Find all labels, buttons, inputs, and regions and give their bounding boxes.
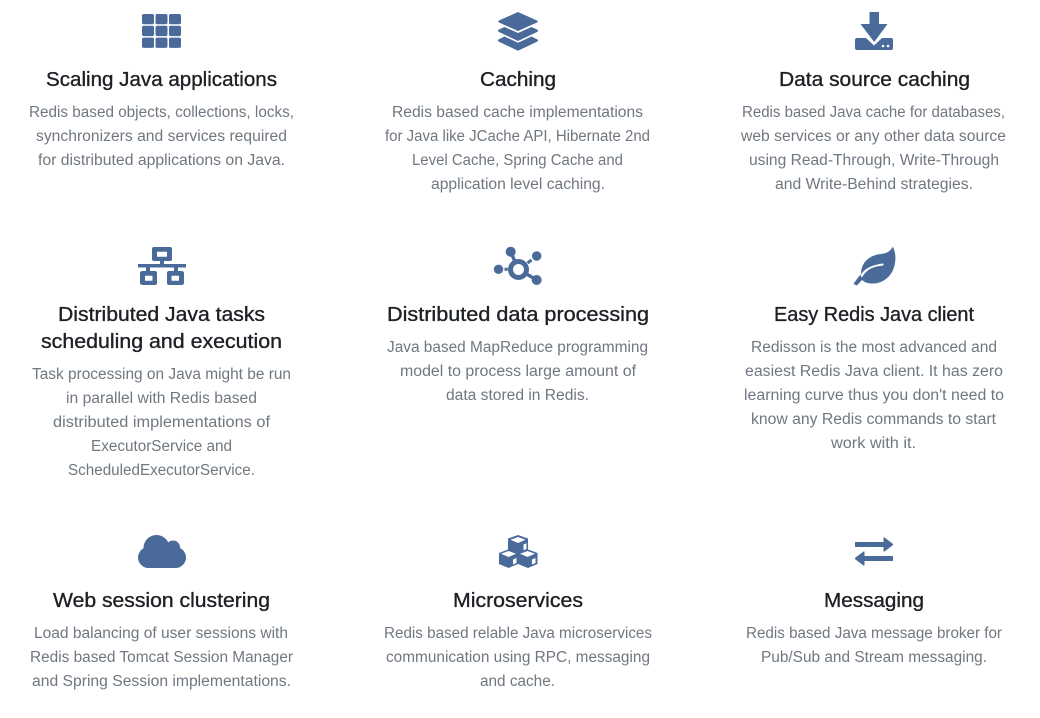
panel: Messaging <box>746 537 1002 666</box>
heading: Easy Redis Java client <box>774 304 974 326</box>
icon: network <box>138 247 186 285</box>
text block: Level Cache, Spring Cache and <box>412 152 623 169</box>
text block: know any Redis commands to start <box>751 411 997 428</box>
panel: Caching <box>385 12 650 193</box>
text block: Redis based cache implementations <box>392 104 643 121</box>
heading: scheduling and execution <box>41 331 282 353</box>
text block <box>30 625 293 690</box>
icon: cubes <box>499 535 538 568</box>
text block: Redis based Java message broker for <box>746 625 1002 642</box>
text block: for Java like JCache API, Hibernate 2nd <box>385 128 650 145</box>
text block <box>744 339 1004 452</box>
text block: for distributed applications on Java. <box>38 152 285 169</box>
text block: application level caching. <box>431 176 605 193</box>
panel: Distributed Java tasks <box>32 247 291 479</box>
text block <box>29 104 294 169</box>
text block <box>384 625 652 690</box>
text block: and Write-Behind strategies. <box>775 176 973 193</box>
heading: Messaging <box>824 590 924 612</box>
heading: Caching <box>480 69 556 91</box>
text block: Java based MapReduce programming <box>387 339 648 356</box>
heading <box>41 304 282 353</box>
text block: and Spring Session implementations. <box>32 673 291 690</box>
text block: communication using RPC, messaging <box>386 649 650 666</box>
panel: Distributed data processing <box>387 247 649 404</box>
text block: learning curve thus you don't need to <box>744 387 1004 404</box>
text block: and cache. <box>480 673 555 690</box>
text block: Task processing on Java might be run <box>32 366 291 383</box>
text block: data stored in Redis. <box>446 387 589 404</box>
text block: using Read-Through, Write-Through <box>749 152 999 169</box>
text block: easiest Redis Java client. It has zero <box>745 363 1003 380</box>
text block: ScheduledExecutorService. <box>68 462 255 479</box>
text block: Redisson is the most advanced and <box>751 339 997 356</box>
icon: leaf <box>854 247 895 286</box>
text block: Load balancing of user sessions with <box>34 625 288 642</box>
heading: Microservices <box>453 590 583 612</box>
text block: synchronizers and services required <box>36 128 287 145</box>
text block: work with it. <box>830 435 916 452</box>
icon: arrows <box>855 537 893 566</box>
text block <box>746 625 1002 666</box>
panel: Scaling Java applications <box>29 14 294 169</box>
icon: layers <box>498 12 538 51</box>
text block: Pub/Sub and Stream messaging. <box>761 649 987 666</box>
panel: Data source caching <box>740 12 1006 193</box>
text block <box>387 339 648 404</box>
icon: cloud <box>138 535 186 568</box>
icon: grid <box>142 14 181 48</box>
text block: Redis based Tomcat Session Manager <box>30 649 293 666</box>
text block: web services or any other data source <box>740 128 1006 145</box>
text block <box>740 104 1006 193</box>
text block: Redis based Java cache for databases, <box>742 104 1005 121</box>
text block: Redis based relable Java microservices <box>384 625 652 642</box>
heading: Web session clustering <box>53 590 270 612</box>
panel: Microservices <box>384 535 652 690</box>
icon: hub <box>494 247 542 285</box>
text block: in parallel with Redis based <box>66 390 257 407</box>
panel: Web session clustering <box>30 535 293 690</box>
text block: ExecutorService and <box>91 438 232 455</box>
text block: distributed implementations of <box>53 414 271 431</box>
text block <box>32 366 291 479</box>
heading: Distributed Java tasks <box>58 304 265 326</box>
heading: Scaling Java applications <box>46 69 277 91</box>
text block: model to process large amount of <box>400 363 637 380</box>
text block: Redis based objects, collections, locks, <box>29 104 294 121</box>
text block <box>385 104 650 193</box>
icon: download <box>855 12 893 50</box>
heading: Data source caching <box>779 69 970 91</box>
heading: Distributed data processing <box>387 304 649 326</box>
panel: Easy Redis Java client <box>744 247 1004 452</box>
